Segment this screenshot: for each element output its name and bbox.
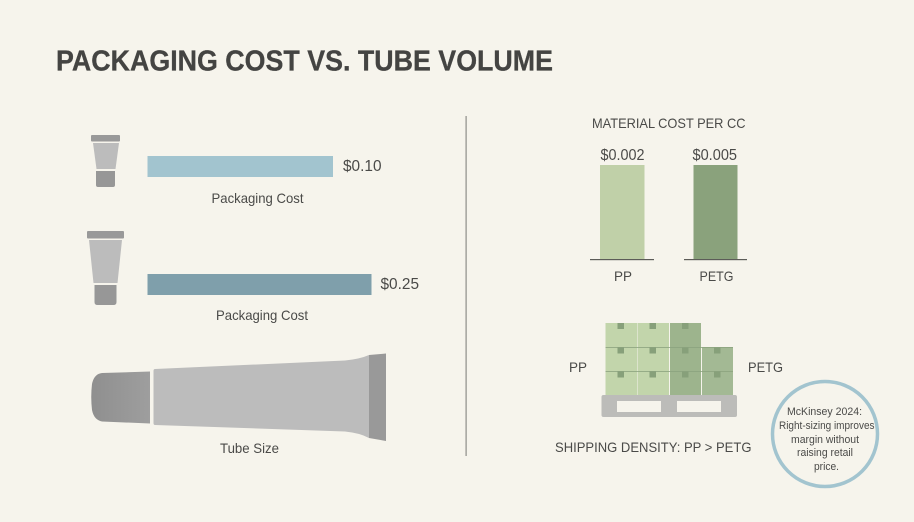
label: packaging cost: Packaging Cost: [212, 190, 304, 206]
icon: stacked boxes on pallet: [602, 323, 737, 417]
divider: [466, 116, 467, 456]
panel: material cost per cc: [590, 115, 747, 284]
baseline: PP: [590, 259, 654, 260]
caption: shipping density: SHIPPING DENSITY: PP > PETG: [555, 439, 752, 455]
callout: McKinsey 2024: McKinsey 2024:: [787, 406, 862, 418]
chart heading: MATERIAL COST PER CC: [592, 115, 746, 131]
callout: McKinsey 2024: Right-sizing improves: [779, 420, 875, 432]
panel: shipping density: [555, 323, 783, 455]
value: $0.005: $0.005: [692, 147, 737, 164]
label: packaging cost: Packaging Cost: [216, 307, 308, 323]
bar: PETG: [694, 165, 738, 259]
icon: large tube: [91, 354, 386, 441]
label: PETG: PETG: [700, 268, 734, 284]
panel: tube size and packaging cost: [87, 135, 419, 456]
title: PACKAGING COST VS. TUBE VOLUME: [56, 46, 553, 78]
baseline: PETG: [684, 259, 747, 260]
label: tube size: Tube Size: [220, 440, 279, 456]
bar: PP: [600, 165, 644, 259]
callout: McKinsey 2024: price.: [814, 461, 839, 473]
label: PETG: PETG: [748, 359, 783, 375]
icon: medium tube: [87, 231, 124, 305]
callout: McKinsey 2024: raising retail: [797, 447, 853, 459]
callout: McKinsey 2024: [772, 382, 878, 486]
icon: small tube: [91, 135, 120, 187]
value: $0.002: $0.002: [600, 147, 645, 164]
label: PP: PP: [569, 359, 587, 375]
bar: small tube packaging cost: [148, 156, 333, 177]
bar: medium tube packaging cost: [148, 274, 372, 295]
label: PP: PP: [614, 268, 632, 284]
callout: McKinsey 2024: margin without: [791, 434, 859, 446]
value: $0.10: $0.10: [343, 158, 382, 175]
value: $0.25: $0.25: [380, 276, 419, 293]
